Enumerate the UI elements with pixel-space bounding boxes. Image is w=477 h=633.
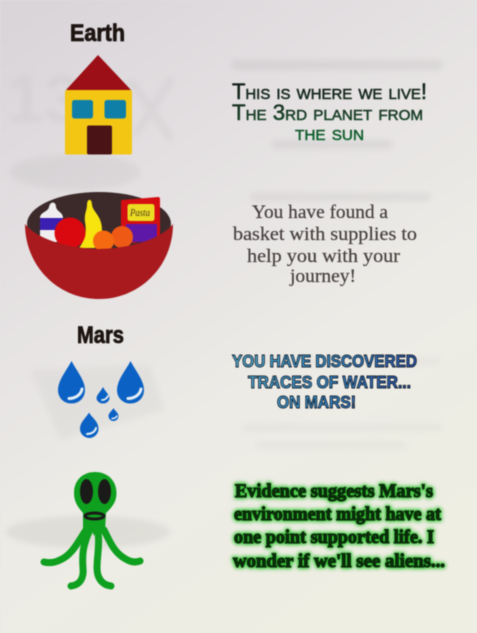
text: evidence suggests life [233,482,445,572]
red ball [54,218,86,248]
text: basket with supplies: You have found a [252,203,388,223]
text: this is where we live [232,79,427,145]
text: basket with supplies: journey! [289,267,356,287]
faint show-through from reverse page: 13 [6,61,82,137]
heading: Earth: Earth [70,20,125,47]
icon: water drops [58,361,144,438]
icon: bowl of supplies [25,192,173,299]
text: basket with supplies [233,203,417,287]
icon: green alien [44,472,140,586]
bottle [40,202,63,242]
icon: house [65,55,132,154]
text: basket with supplies: help you with your [247,247,400,267]
oranges [93,226,133,252]
text: discovered water: YOU HAVE DISCOVERED [232,351,417,371]
panel: mars [44,322,445,586]
text: this is where we live: This is where we live! [232,79,427,104]
faint show-through from reverse page [6,60,442,548]
panel: earth [25,20,427,299]
text: basket with supplies: basket with supplies to [233,225,417,245]
text: evidence suggests life: Evidence suggests Mars's [235,482,433,502]
pasta box: Pasta [129,208,150,219]
text: evidence suggests life: environment might have at [234,505,442,525]
pasta box [121,197,160,243]
bowl body [25,224,173,299]
text: discovered water: TRACES OF WATER... [248,372,411,392]
text: discovered water [232,351,417,412]
banana [79,200,102,248]
text: this is where we live: The 3rd planet from [232,100,423,125]
text: discovered water: ON MARS! [277,392,356,412]
text: evidence suggests life: one point supported life. I [234,528,434,548]
text: evidence suggests life: wonder if we'll see aliens... [233,552,445,572]
heading: Mars: Mars [77,322,124,349]
text: this is where we live: the sun [295,120,364,145]
